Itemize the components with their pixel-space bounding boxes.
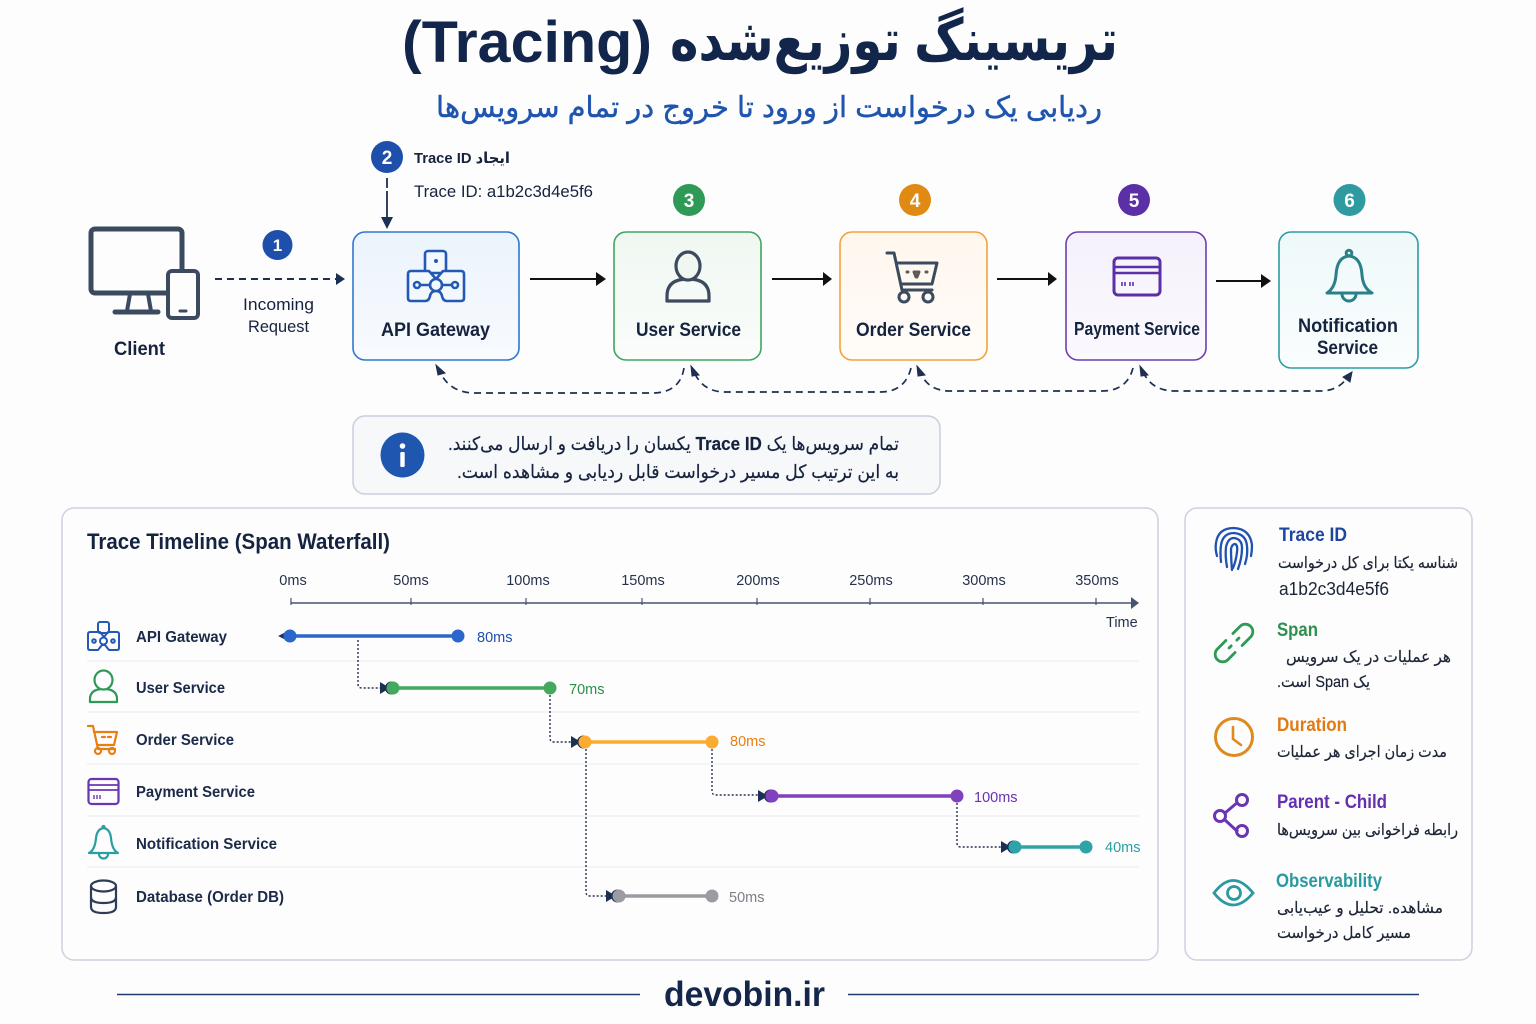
label: Database (Order DB)	[136, 889, 284, 906]
node: Notification Service	[1279, 232, 1418, 368]
footer: devobin.ir	[664, 975, 825, 1014]
badge 5	[1118, 184, 1150, 216]
icon: gateway	[88, 622, 119, 650]
node: User Service	[614, 232, 761, 360]
description: شناسه یکتا برای کل درخواست	[1278, 555, 1458, 573]
label: Order Service	[136, 732, 234, 749]
label: incoming request: Incoming	[243, 295, 314, 314]
icon: client devices	[91, 229, 198, 318]
icon: user	[90, 670, 117, 702]
arrow	[997, 272, 1057, 286]
duration: 50ms	[729, 890, 764, 906]
badge 6	[1334, 184, 1366, 216]
label: User Service	[636, 319, 741, 341]
description: مدت زمان اجرای هر عملیات	[1277, 744, 1447, 762]
time axis: 150ms	[621, 573, 665, 589]
heading: Trace ID	[1279, 525, 1347, 546]
icon: link	[1212, 621, 1256, 665]
panel: trace timeline	[62, 508, 1158, 960]
duration: 70ms	[569, 682, 604, 698]
time axis: 50ms	[393, 573, 429, 589]
badge 3	[673, 184, 705, 216]
label	[1298, 315, 1398, 359]
time axis: 100ms	[506, 573, 550, 589]
duration: 80ms	[730, 734, 765, 750]
span bar	[758, 790, 964, 802]
icon: bell	[1327, 250, 1372, 301]
span bar	[571, 736, 718, 748]
duration: 100ms	[974, 790, 1018, 806]
badge 2: 2	[382, 148, 392, 169]
flow diagram	[91, 141, 1418, 393]
label: API Gateway	[381, 319, 490, 341]
heading: Trace Timeline (Span Waterfall)	[87, 529, 390, 554]
arrows: trace context propagation	[436, 365, 1352, 393]
icon: database	[91, 880, 116, 913]
heading: Parent - Child	[1277, 792, 1387, 813]
text: line 2: به این ترتیب کل مسیر درخواست قابل ردیابی و مشاهده است.	[457, 461, 899, 483]
arrow	[1216, 274, 1271, 288]
icon: clock	[1216, 718, 1252, 756]
item: Span	[1212, 620, 1451, 691]
badge 1: 1	[273, 236, 282, 255]
time axis: 0ms	[279, 573, 307, 589]
label: Payment Service	[136, 784, 255, 801]
time axis	[279, 573, 1139, 631]
badge 4: 4	[910, 191, 921, 212]
icon: fingerprint	[1216, 528, 1252, 570]
arrow: incoming request	[215, 273, 345, 285]
icon: info	[380, 432, 424, 478]
badge 5: 5	[1129, 191, 1140, 212]
item: Trace ID	[1216, 525, 1458, 599]
label: Order Service	[856, 319, 971, 341]
label: Service	[1317, 337, 1378, 359]
title: (Tracing)	[402, 10, 652, 75]
time axis: Time	[1106, 615, 1138, 631]
label: User Service	[136, 680, 225, 697]
badge 2	[371, 141, 403, 173]
heading: Duration	[1277, 715, 1347, 736]
title	[402, 7, 1118, 75]
row: Notification Service	[89, 826, 1140, 859]
subtitle: ردیابی یک درخواست از ورود تا خروج در تمام سرویس‌ها	[436, 92, 1102, 125]
item: Parent - Child	[1214, 792, 1458, 840]
row: Payment Service	[88, 779, 1018, 806]
arrow: trace id to gateway	[381, 178, 393, 229]
label: Notification	[1298, 315, 1398, 337]
icon: card	[1114, 258, 1160, 295]
heading: Observability	[1276, 871, 1382, 892]
row: Database	[91, 880, 764, 913]
connectors: parent to child	[358, 640, 1002, 896]
description: مشاهده. تحلیل و عیب‌یابی	[1277, 900, 1443, 918]
label: Notification Service	[136, 836, 277, 853]
row: Order Service	[88, 726, 765, 754]
row: API Gateway	[88, 622, 512, 650]
description line 2: یک Span است.	[1277, 674, 1370, 691]
info callout	[353, 416, 940, 494]
row: User Service	[90, 670, 604, 702]
label: trace id value: Trace ID: a1b2c3d4e5f6	[414, 182, 593, 201]
duration: 80ms	[477, 630, 512, 646]
item: Duration	[1216, 715, 1447, 762]
label: client: Client	[114, 339, 166, 360]
node: Order Service	[840, 232, 987, 360]
badge 4	[899, 184, 931, 216]
badge 1	[262, 230, 292, 260]
span bar	[606, 890, 718, 902]
icon: eye	[1214, 880, 1253, 905]
time axis: 250ms	[849, 573, 893, 589]
label: incoming request: Request	[248, 317, 309, 336]
icon: share	[1214, 794, 1248, 836]
description line 2: مسیر کامل درخواست	[1277, 925, 1411, 943]
label: create trace id: ایجاد Trace ID	[414, 150, 510, 167]
node: API Gateway	[353, 232, 519, 360]
badge 3: 3	[684, 191, 694, 212]
arrow	[530, 272, 606, 286]
description: هر عملیات در یک سرویس	[1286, 649, 1451, 667]
span bar	[278, 630, 464, 642]
arrow	[772, 272, 832, 286]
badge 6: 6	[1344, 191, 1355, 212]
heading: Span	[1277, 620, 1318, 641]
label: API Gateway	[136, 629, 227, 646]
text: line 1: تمام سرویس‌ها یک Trace ID یکسان را دریافت و ارسال می‌کنند.	[448, 433, 899, 455]
icon: bell	[89, 826, 118, 859]
title: تریسینگ توزیع‌شده	[670, 7, 1118, 75]
time axis: 200ms	[736, 573, 780, 589]
icon: cart	[88, 726, 117, 754]
time axis: 350ms	[1075, 573, 1119, 589]
label: Payment Service	[1074, 318, 1200, 339]
span bar	[380, 682, 556, 694]
span bar	[1001, 840, 1092, 854]
icon: gateway	[408, 251, 464, 301]
value: a1b2c3d4e5f6	[1279, 579, 1389, 599]
icon: cart	[887, 253, 937, 302]
icon: card	[88, 779, 118, 804]
description: رابطه فراخوانی بین سرویس‌ها	[1277, 822, 1458, 840]
label: incoming request	[243, 295, 314, 336]
time axis: 300ms	[962, 573, 1006, 589]
panel: glossary	[1185, 508, 1472, 960]
item: Observability	[1214, 871, 1443, 943]
icon: user	[667, 252, 709, 301]
node: Payment Service	[1066, 232, 1206, 360]
duration: 40ms	[1105, 840, 1140, 856]
